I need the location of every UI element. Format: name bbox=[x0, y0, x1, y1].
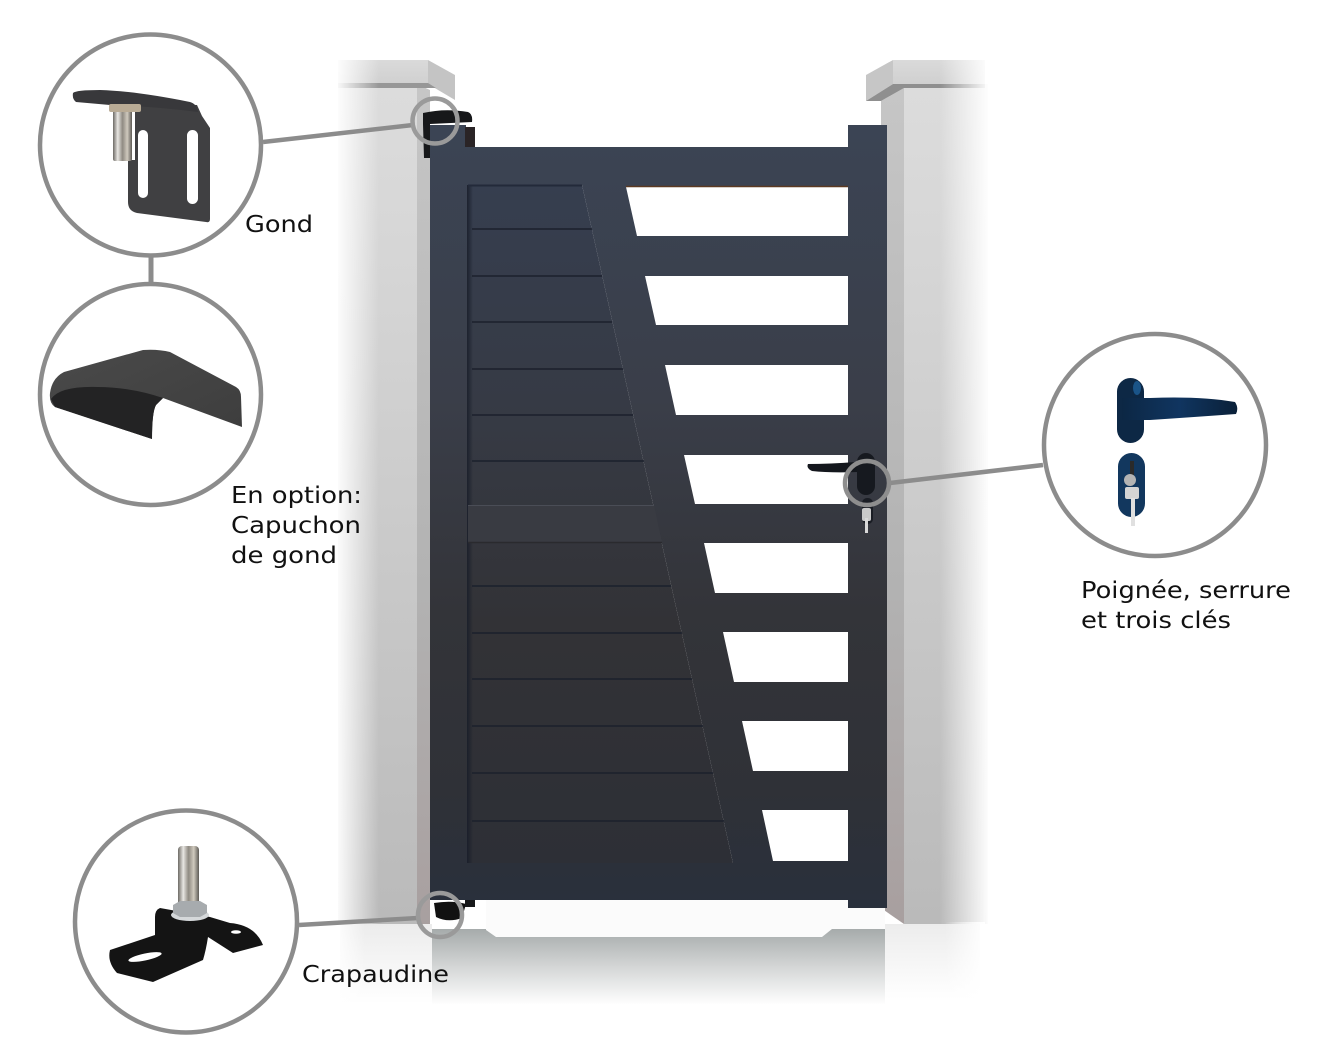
label: gond: Gond bbox=[245, 210, 313, 238]
connector: gond to capuchon bbox=[148, 256, 154, 283]
label: capuchon: En option: bbox=[231, 481, 362, 509]
connector: crapaudine bbox=[299, 918, 418, 925]
label: capuchon bbox=[231, 481, 362, 569]
right pillar bbox=[866, 58, 990, 928]
label: poignée bbox=[1081, 576, 1291, 634]
middle rail bbox=[468, 505, 662, 543]
panel: crapaudine bbox=[75, 810, 297, 1032]
panel left shadow bbox=[467, 185, 473, 863]
connector: gond bbox=[263, 125, 413, 142]
floor reflection bbox=[335, 900, 985, 1006]
infill panel bbox=[468, 185, 733, 863]
gate frame bbox=[430, 125, 887, 908]
gate handle and keys bbox=[808, 453, 875, 533]
gate pivot bbox=[434, 900, 475, 920]
marker: poignée bbox=[845, 461, 889, 505]
label: capuchon: de gond bbox=[231, 541, 337, 569]
label: crapaudine: Crapaudine bbox=[302, 960, 449, 988]
panel: capuchon bbox=[40, 284, 261, 505]
marker: gond bbox=[412, 98, 458, 144]
left pillar bbox=[335, 58, 455, 930]
gate bbox=[430, 125, 887, 908]
panel: poignée bbox=[1044, 334, 1266, 556]
icon: capuchon de gond bbox=[50, 350, 242, 439]
icon: lock and keys bbox=[1118, 453, 1145, 526]
gate hinge on post bbox=[423, 110, 475, 158]
icon: gond hinge bbox=[73, 90, 210, 222]
label: poignée: et trois clés bbox=[1081, 606, 1231, 634]
label: poignée: Poignée, serrure bbox=[1081, 576, 1291, 604]
panel: gond bbox=[40, 34, 261, 256]
icon: door handle bbox=[1117, 378, 1237, 443]
connector: poignée bbox=[890, 465, 1043, 483]
panel grooves bbox=[472, 229, 724, 821]
icon: crapaudine pivot bbox=[109, 846, 263, 982]
marker: crapaudine bbox=[418, 893, 462, 937]
label: capuchon: Capuchon bbox=[231, 511, 361, 539]
